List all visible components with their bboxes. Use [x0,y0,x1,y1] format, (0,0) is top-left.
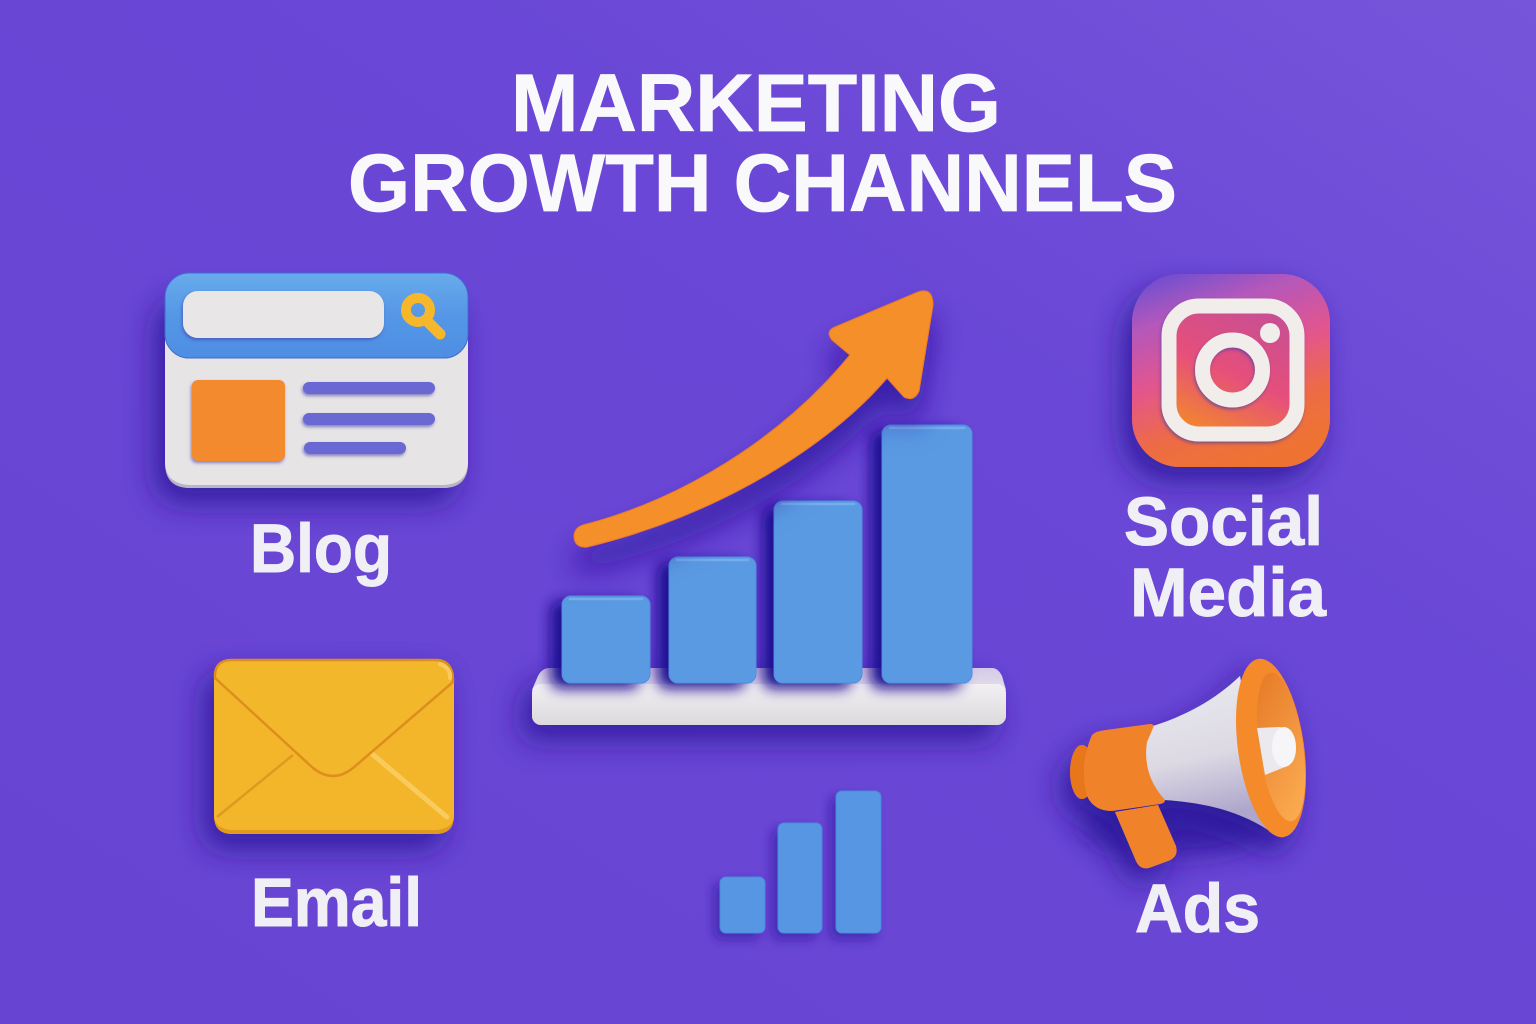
small bar chart icon [720,791,881,933]
title: MARKETING [511,58,1001,149]
orange grip [1084,724,1165,811]
label: Social Media: Media [1130,554,1327,631]
label: Email: Email [251,864,422,941]
window bottom bevel [165,463,468,488]
icon: magnifier [406,298,440,334]
label: Ads: Ads [1135,870,1260,947]
icon: megaphone [1070,654,1316,868]
central bar chart [532,291,1006,725]
speaker plug [1257,727,1296,775]
envelope lower folds [217,755,293,817]
camera body [1169,306,1297,434]
label: Social Media: Social [1124,483,1323,560]
bar top highlights [570,428,964,599]
horn body [1135,676,1268,830]
browser header bar [165,273,468,358]
megaphone cast shadow [1080,793,1270,857]
icon: instagram [1132,274,1330,467]
growth arrow [574,291,933,547]
text lines [303,382,435,454]
camera lens [1202,340,1262,400]
icon: envelope [214,659,454,834]
envelope bottom edge [214,816,454,834]
back cap [1070,745,1094,799]
title [348,58,1177,229]
label: Blog: Blog [250,510,392,587]
camera dot [1260,323,1280,343]
speaker plug cap [1272,727,1296,767]
title: GROWTH CHANNELS [348,138,1177,229]
handle [1115,805,1177,868]
envelope flap [215,660,453,776]
label: Social Media [1124,483,1327,631]
search field [183,291,384,338]
orange thumbnail [192,380,285,461]
chart shelf [532,668,1006,725]
envelope corner highlight [440,664,450,678]
cone rim [1226,654,1316,842]
icon: blog browser window [165,273,468,488]
cone interior [1249,670,1313,824]
bars [562,425,972,683]
